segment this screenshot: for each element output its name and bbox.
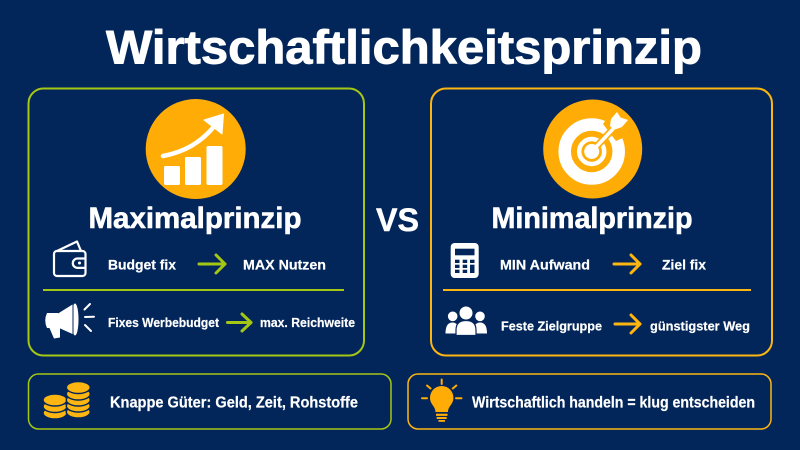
icon: group of people (446, 306, 487, 336)
icon: wallet (54, 242, 86, 276)
text: Ziel fix: Ziel fix (662, 258, 707, 272)
heading: Maximalprinzip: Maximalprinzip (88, 202, 302, 235)
callout: economic action (408, 374, 771, 429)
panel: Maximalprinzip (28, 88, 364, 356)
text: Fixes Werbebudget: Fixes Werbebudget (108, 316, 220, 330)
icon: calculator (451, 243, 479, 278)
text: Knappe Güter: Knappe Güter: Geld, Zeit, Rohstoffe (110, 394, 358, 412)
callout: scarce goods (28, 374, 391, 429)
arrow: budget to benefit (199, 255, 225, 273)
icon: light bulb (422, 380, 462, 422)
label: VS: VS (376, 202, 419, 238)
text: MIN Aufwand: MIN Aufwand (500, 258, 590, 272)
icon: megaphone (45, 303, 94, 338)
text: Budget fix: Budget fix (108, 258, 177, 272)
icon: target with arrow (543, 100, 642, 198)
arrow: audience to route (615, 315, 640, 333)
icon: growth chart (146, 99, 246, 199)
arrow: budget to reach (228, 314, 251, 331)
icon: coin stacks (43, 382, 90, 419)
text: Wirtschaftlich handeln: Wirtschaftlich handeln = klug entscheiden (472, 394, 755, 412)
arrow: effort to goal (614, 255, 640, 273)
text: MAX Nutzen: MAX Nutzen (243, 258, 326, 272)
text: günstigster Weg: günstigster Weg (650, 320, 750, 334)
heading: Minimalprinzip: Minimalprinzip (492, 202, 692, 235)
title: Wirtschaftlichkeitsprinzip (106, 20, 702, 74)
text: Feste Zielgruppe: Feste Zielgruppe (501, 320, 602, 334)
panel: Minimalprinzip (431, 88, 772, 356)
text: max. Reichweite: max. Reichweite (260, 316, 355, 330)
